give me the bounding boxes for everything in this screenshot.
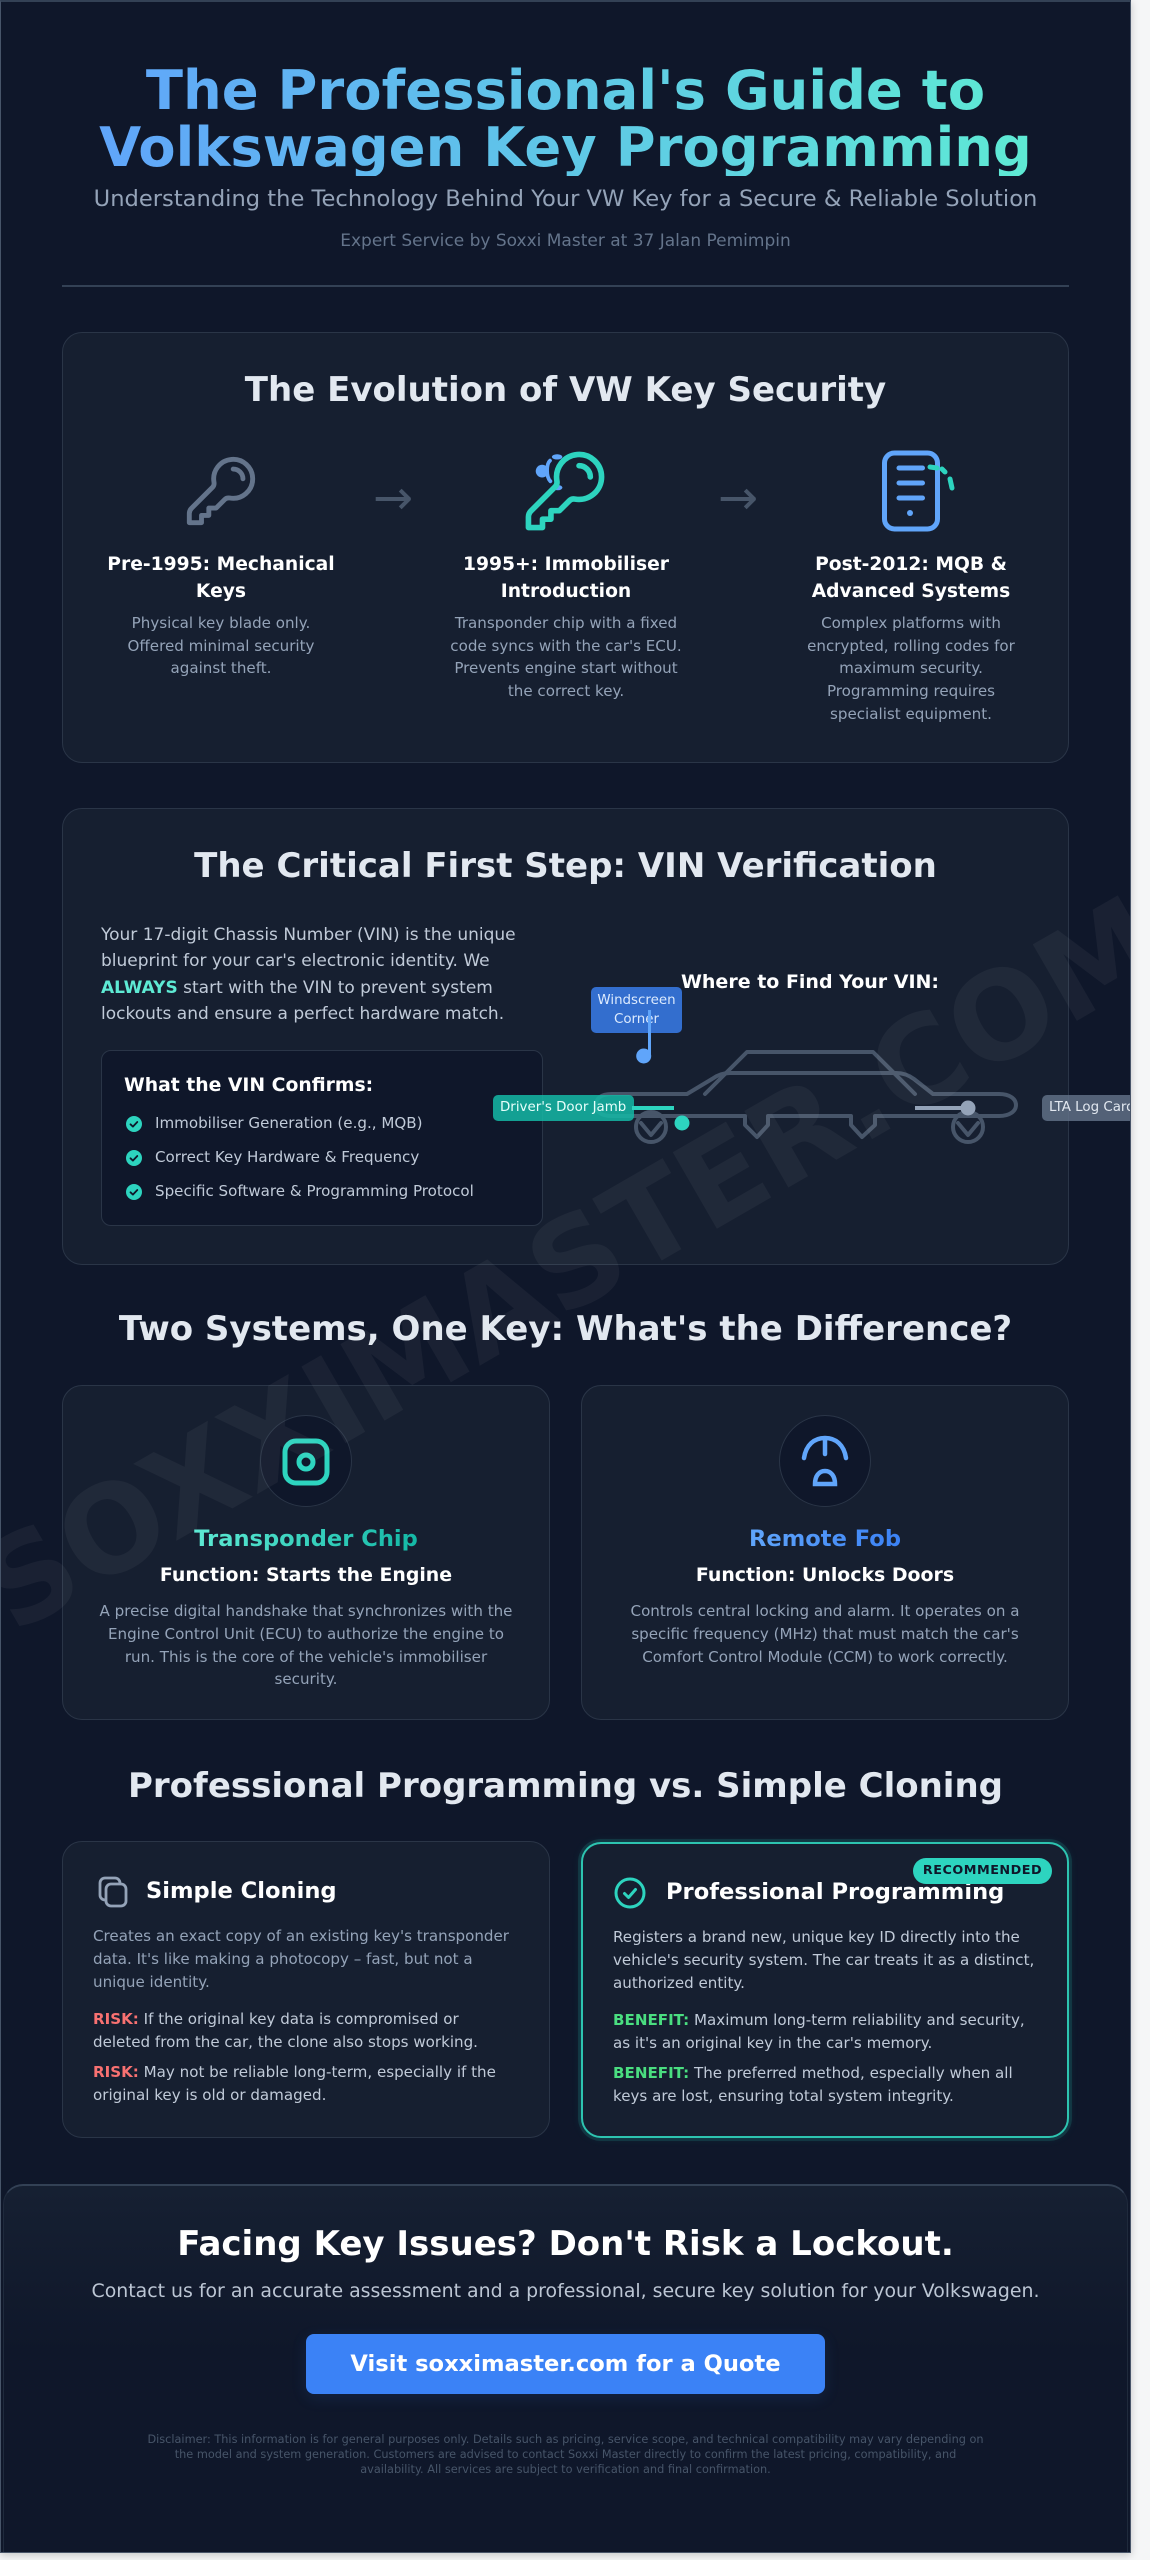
card title: Remote Fob (749, 1526, 901, 1552)
step 3 text (807, 554, 1015, 723)
panel: VIN verification (62, 808, 1069, 1265)
card heading: Professional Programming (666, 1879, 1004, 1905)
step 1 description (128, 614, 314, 677)
icon: check (126, 1116, 142, 1132)
panel: evolution of VW key security (62, 332, 1069, 763)
benefit item (613, 2064, 1013, 2105)
disclaimer: Disclaimer: This information is for general purposes only. Details such as pricing, service scope, and technical compatibility may vary depending on (147, 2433, 984, 2446)
panel: call to action (3, 2184, 1128, 2556)
card description: Engine Control Unit (ECU) to authorize the engine to (108, 1625, 504, 1643)
CTA subtext: Contact us for an accurate assessment and a professional, secure key solution for your Volkswagen. (92, 2280, 1039, 2302)
header (94, 59, 1037, 251)
arrow: → (373, 470, 413, 526)
card heading: Simple Cloning (146, 1878, 337, 1904)
icon: check (126, 1184, 142, 1200)
step 3 description: maximum security. (839, 659, 983, 677)
card function: Function: Starts the Engine (160, 1564, 452, 1586)
CTA button (306, 2334, 825, 2394)
label: LTA log card (1042, 1095, 1142, 1121)
icon: chip badge (260, 1415, 352, 1507)
VIN paragraph: blueprint for your car's electronic identity. We (101, 951, 490, 971)
description text: unique identity. (93, 1973, 210, 1991)
step 2 text (450, 554, 682, 700)
description text: Registers a brand new, unique key ID directly into the (613, 1928, 1020, 1946)
card function: Function: Unlocks Doors (696, 1564, 954, 1586)
description text: Creates an exact copy of an existing key's transponder (93, 1927, 509, 1945)
pointer: windscreen corner (636, 1010, 652, 1064)
icon: chip (282, 1438, 330, 1486)
header rule (62, 285, 1069, 287)
VIN paragraph (101, 925, 516, 1024)
expert service line: Expert Service by Soxxi Master at 37 Jalan Pemimpin (340, 231, 791, 251)
label: driver's door jamb: Driver's Door Jamb (500, 1100, 626, 1115)
card description: Comfort Control Module (CCM) to work correctly. (642, 1648, 1008, 1666)
disclaimer (147, 2433, 984, 2476)
card description: security. (275, 1670, 337, 1688)
risk item (93, 2010, 478, 2051)
icon: check circle (614, 1878, 646, 1908)
step 1 description: Physical key blade only. (132, 614, 310, 632)
icon: fob badge (779, 1415, 871, 1507)
step 1 text (107, 554, 335, 677)
card: simple cloning (62, 1841, 550, 2138)
description text (93, 1927, 509, 1991)
step 2 description (450, 614, 682, 700)
CTA heading: Facing Key Issues? Don't Risk a Lockout. (177, 2224, 954, 2264)
description text: data. It's like making a photocopy – fast, but not a (93, 1950, 473, 1968)
card: remote fob (581, 1385, 1069, 1720)
heading: VIN verification: The Critical First Step: VIN Verification (194, 846, 937, 886)
step 2 description: Transponder chip with a fixed (455, 614, 677, 632)
label: driver's door jamb (493, 1095, 634, 1121)
description (93, 1927, 509, 2104)
title: Volkswagen Key Programming (99, 116, 1032, 179)
title: The Professional's Guide to (146, 59, 985, 122)
description text: authorized entity. (613, 1974, 745, 1992)
risk item: RISK: If the original key data is compromised or (93, 2010, 459, 2028)
step 1 description: Offered minimal security (128, 637, 314, 655)
where to find heading: Where to Find Your VIN: (681, 971, 939, 993)
card description: Controls central locking and alarm. It operates on a (631, 1602, 1019, 1620)
card description: run. This is the core of the vehicle's immobiliser (125, 1648, 487, 1666)
icon: mechanical key (186, 456, 256, 526)
benefit item (613, 2011, 1025, 2052)
step 2 description: the correct key. (508, 682, 624, 700)
description text: vehicle's security system. The car treats it as a distinct, (613, 1951, 1034, 1969)
confirms heading: What the VIN Confirms: (124, 1075, 373, 1096)
heading: evolution: The Evolution of VW Key Security (245, 370, 886, 410)
title (99, 59, 1032, 179)
VIN confirms box (101, 1050, 543, 1226)
benefit item: BENEFIT: The preferred method, especially when all (613, 2064, 1013, 2082)
step 2 heading: 1995+: Immobiliser (463, 554, 669, 575)
card description (631, 1602, 1019, 1666)
risk item: deleted from the car, the clone also stops working. (93, 2033, 478, 2051)
disclaimer: availability. All services are subject to verification and final confirmation. (360, 2463, 771, 2476)
subtitle: Understanding the Technology Behind Your VW Key for a Secure & Reliable Solution (94, 186, 1037, 212)
step 3 heading: Advanced Systems (812, 581, 1010, 602)
risk item: original key is old or damaged. (93, 2086, 326, 2104)
label: windscreen corner: Windscreen (597, 993, 676, 1008)
disclaimer: the model and system generation. Customers are advised to contact Soxxi Master directly to confirm the latest pricing, compatibility, and (175, 2448, 956, 2461)
step 3 description: specialist equipment. (830, 705, 992, 723)
pointer: LTA log card (915, 1100, 976, 1116)
card description (100, 1602, 512, 1688)
step 1 heading: Pre-1995: Mechanical (107, 554, 335, 575)
step 2 description: code syncs with the car's ECU. (450, 637, 682, 655)
icon: copy (98, 1876, 128, 1908)
badge: recommended (913, 1858, 1052, 1884)
risk item (93, 2063, 496, 2104)
step 2 heading (463, 554, 669, 602)
description text (613, 1928, 1034, 1992)
list item: Correct Key Hardware & Frequency (155, 1148, 419, 1166)
VIN paragraph: ALWAYS start with the VIN to prevent system (101, 978, 493, 998)
heading: two systems: Two Systems, One Key: What's the Difference? (119, 1309, 1012, 1349)
car diagram (600, 1050, 1018, 1144)
step 3 heading: Post-2012: MQB & (815, 554, 1007, 575)
icon: check (126, 1150, 142, 1166)
list item: Immobiliser Generation (e.g., MQB) (155, 1114, 423, 1132)
description (613, 1928, 1034, 2105)
card title: Transponder Chip (194, 1526, 418, 1552)
step 3 description: Programming requires (827, 682, 995, 700)
label: windscreen corner (591, 987, 682, 1033)
step 2 heading: Introduction (501, 581, 631, 602)
card: professional programming (581, 1842, 1069, 2138)
benefit item: as it's an original key in the car's memory. (613, 2034, 932, 2052)
CTA button: Visit soxximaster.com for a Quote (350, 2351, 781, 2377)
label: windscreen corner: Corner (614, 1012, 659, 1027)
step 1 heading: Keys (196, 581, 246, 602)
VIN paragraph: lockouts and ensure a perfect hardware match. (101, 1004, 504, 1024)
step 2 description: Prevents engine start without (454, 659, 678, 677)
card: transponder chip (62, 1385, 550, 1720)
step 3 description: encrypted, rolling codes for (807, 637, 1015, 655)
badge: recommended: RECOMMENDED (923, 1863, 1042, 1878)
arrow: → (718, 470, 758, 526)
icon: remote fob signal (802, 1436, 848, 1486)
step 1 heading (107, 554, 335, 602)
VIN paragraph: Your 17-digit Chassis Number (VIN) is the unique (101, 925, 516, 945)
risk item: RISK: May not be reliable long-term, especially if the (93, 2063, 496, 2081)
benefit item: keys are lost, ensuring total system integrity. (613, 2087, 954, 2105)
list item: Specific Software & Programming Protocol (155, 1182, 474, 1200)
step 1 description: against theft. (171, 659, 271, 677)
icon: smart key device (882, 450, 954, 532)
card description: A precise digital handshake that synchronizes with the (100, 1602, 512, 1620)
heading: programming vs cloning: Professional Programming vs. Simple Cloning (128, 1766, 1003, 1806)
confirms list (126, 1114, 474, 1200)
step 3 heading (812, 554, 1010, 602)
benefit item: BENEFIT: Maximum long-term reliability and security, (613, 2011, 1025, 2029)
icon: immobiliser key with chip (526, 452, 604, 530)
card description: specific frequency (MHz) that must match the car's (631, 1625, 1019, 1643)
step 3 description: Complex platforms with (821, 614, 1001, 632)
step 3 description (807, 614, 1015, 723)
pointer: driver's door jamb (632, 1106, 690, 1130)
